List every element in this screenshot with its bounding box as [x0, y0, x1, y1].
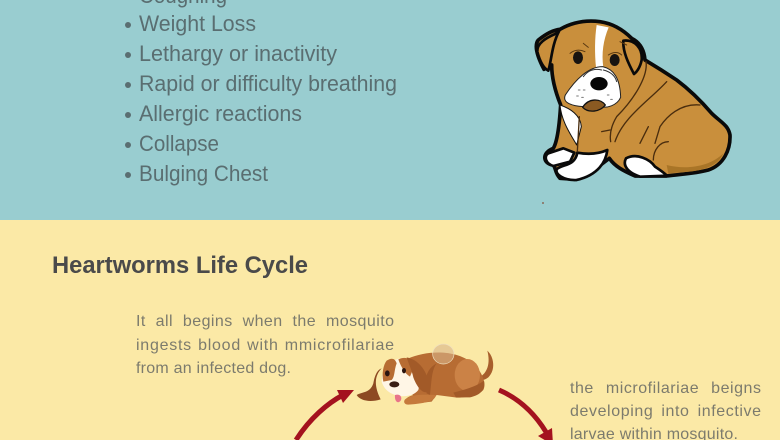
panel: symptoms: [0, 0, 780, 220]
arrow: return to dog: [296, 390, 354, 440]
text block: step one: ingests blood with mmicrofilariae: [136, 337, 394, 354]
symptoms list: Bulging Chest: [139, 161, 268, 186]
symptoms list: Allergic reactions: [139, 101, 302, 126]
arrow: to larvae stage: [499, 390, 553, 440]
heading: life cycle: Heartworms Life Cycle: [52, 252, 308, 279]
symptoms list: Rapid or difficulty breathing: [139, 71, 397, 96]
text block: step one: It all begins when the mosquito: [136, 313, 394, 330]
text block: step one: from an infected dog.: [136, 360, 291, 377]
symptoms list: [125, 0, 397, 186]
symptoms list: Collapse: [139, 131, 219, 156]
symptoms list: Lethargy or inactivity: [139, 41, 337, 66]
text block: step one: [136, 313, 394, 377]
panel: life cycle: [0, 220, 780, 440]
icon: bulldog puppy: [536, 21, 730, 180]
symptoms list: Weight Loss: [139, 11, 256, 36]
text block: step two: developing into infective: [570, 403, 761, 420]
text block: step two: the microfilariae beigns: [570, 380, 761, 397]
icon: sleeping dog: [357, 344, 493, 405]
speck: [542, 202, 544, 204]
text block: step two: [570, 380, 761, 440]
